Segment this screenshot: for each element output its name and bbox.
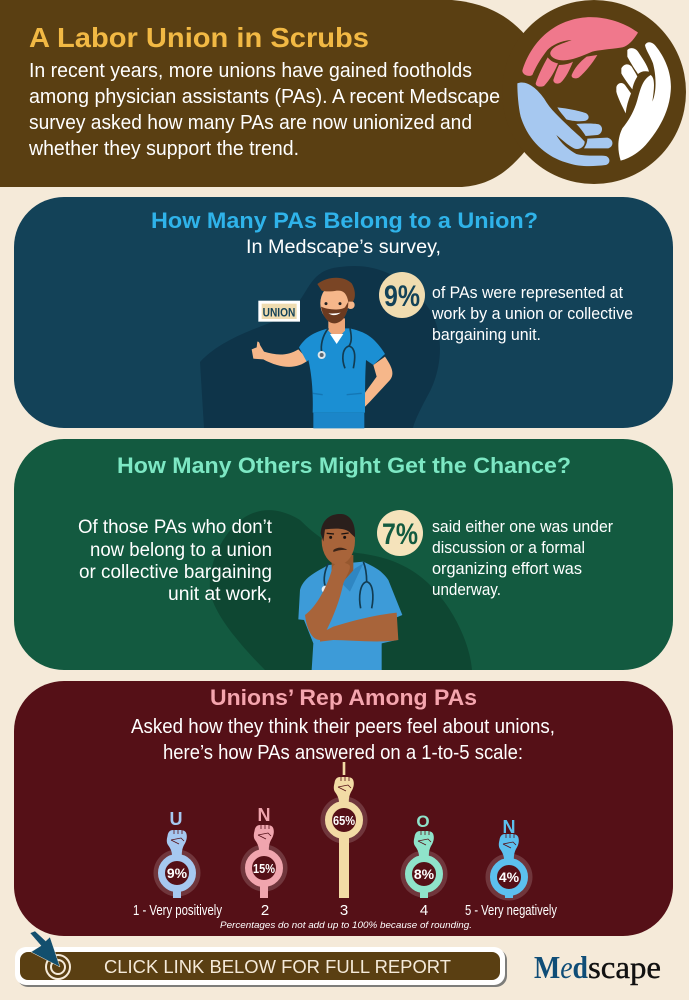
intro text: whether they support the trend. [28, 138, 299, 160]
7% badge: 7% [382, 518, 418, 551]
header banner shape [0, 0, 526, 187]
9% description: of PAs were represented at [432, 283, 623, 302]
left description: unit at work, [168, 583, 272, 605]
button: click link below [15, 931, 507, 987]
7% description: discussion or a formal [432, 538, 585, 557]
intro text: In recent years, more unions have gained footholds [29, 60, 472, 82]
9% badge: 9% [384, 280, 420, 313]
logo: Medscape: scape [588, 949, 661, 985]
blue panel background [14, 197, 673, 428]
panel: unions' rep among PAs [14, 681, 673, 936]
7% description [432, 517, 613, 599]
union sign [258, 301, 300, 322]
chart: fist pictogram, 4 at 8%: O [416, 812, 430, 831]
intro text: Asked how they think their peers feel about unions, [131, 716, 555, 738]
chart: fist pictogram, 2 at 15% [240, 805, 288, 919]
intro text: survey asked how many PAs are now unionized and [29, 112, 472, 134]
intro text: here’s how PAs answered on a 1-to-5 scale: [163, 742, 523, 764]
title: A Labor Union in Scrubs [29, 22, 369, 53]
7% description: organizing effort was [432, 559, 582, 578]
chart: fist pictogram, 5 - very negatively 4%: N [502, 817, 516, 837]
footnote: Percentages do not add up to 100% because of rounding. [220, 920, 472, 931]
button fill [20, 952, 500, 980]
chart: fist pictogram, 5 - very negatively 4%: 4% [499, 869, 520, 885]
chart: fist pictogram, 1 - very positively 9%: U [170, 809, 182, 829]
green panel background [14, 439, 673, 670]
button shadow [17, 949, 507, 987]
9% description: work by a union or collective [431, 304, 633, 323]
9% badge [379, 272, 425, 318]
icon: target rings [46, 955, 70, 979]
9% description: bargaining unit. [432, 325, 541, 344]
maroon panel background [14, 681, 673, 936]
chart: fist pictogram, 3 at 65%: 3 [340, 902, 348, 919]
intro text [131, 716, 555, 764]
chart: fist pictogram, 5 - very negatively 4% [465, 817, 557, 919]
9% description [431, 283, 633, 344]
panel: how many others might get the chance [14, 439, 673, 670]
button outline [15, 947, 505, 985]
chart: fist pictogram, 4 at 8% [400, 812, 448, 919]
left description [78, 516, 273, 605]
chart: fist pictogram, 2 at 15%: 2 [261, 902, 269, 919]
7% description: said either one was under [432, 517, 613, 536]
heading: How Many PAs Belong to a Union? [151, 208, 538, 233]
left description: Of those PAs who don’t [78, 516, 273, 538]
illustration: smiling PA with union sign [252, 278, 392, 428]
intro text [28, 60, 500, 160]
panel: how many PAs belong to a union [14, 197, 673, 428]
intro text: among physician assistants (PAs). A recent Medscape [29, 86, 500, 108]
chart: fist pictogram, 3 at 65% [320, 759, 368, 919]
chart: fist pictogram, 2 at 15%: 15% [253, 861, 275, 876]
left description: or collective bargaining [79, 561, 272, 583]
intro line: In Medscape’s survey, [246, 237, 441, 258]
chart: fist pictogram, 2 at 15%: N [258, 805, 270, 825]
dark blob [210, 510, 472, 670]
chart: fist pictogram, 1 - very positively 9%: 9% [167, 865, 188, 881]
illustration: thinking PA [298, 514, 402, 670]
icon: three hands [517, 17, 671, 166]
button label: CLICK LINK BELOW FOR FULL REPORT [104, 956, 451, 977]
dark blob [200, 266, 440, 428]
heading: How Many Others Might Get the Chance? [117, 453, 571, 478]
chart: fist pictogram, 3 at 65%: I [341, 759, 347, 779]
union sign: UNION [263, 305, 295, 319]
chart: fist pictogram, 4 at 8%: 8% [414, 866, 435, 882]
heading: Unions’ Rep Among PAs [210, 685, 477, 710]
chart: fist pictogram, 5 - very negatively 4%: 5 - Very negatively [465, 902, 557, 919]
left description: now belong to a union [90, 539, 272, 561]
logo: Medscape [534, 949, 661, 985]
7% description: underway. [432, 580, 501, 599]
icon: arrow [30, 931, 60, 967]
header circle [502, 0, 686, 184]
chart: fist pictogram, 3 at 65%: 65% [333, 813, 355, 828]
7% badge [377, 510, 423, 556]
panel: header [0, 0, 686, 187]
logo: Medscape: Med [534, 949, 588, 985]
chart: fist pictogram, 4 at 8%: 4 [420, 902, 428, 919]
chart: fist pictogram, 1 - very positively 9% [133, 809, 222, 919]
chart: fist pictogram, 1 - very positively 9%: 1 - Very positively [133, 902, 222, 919]
